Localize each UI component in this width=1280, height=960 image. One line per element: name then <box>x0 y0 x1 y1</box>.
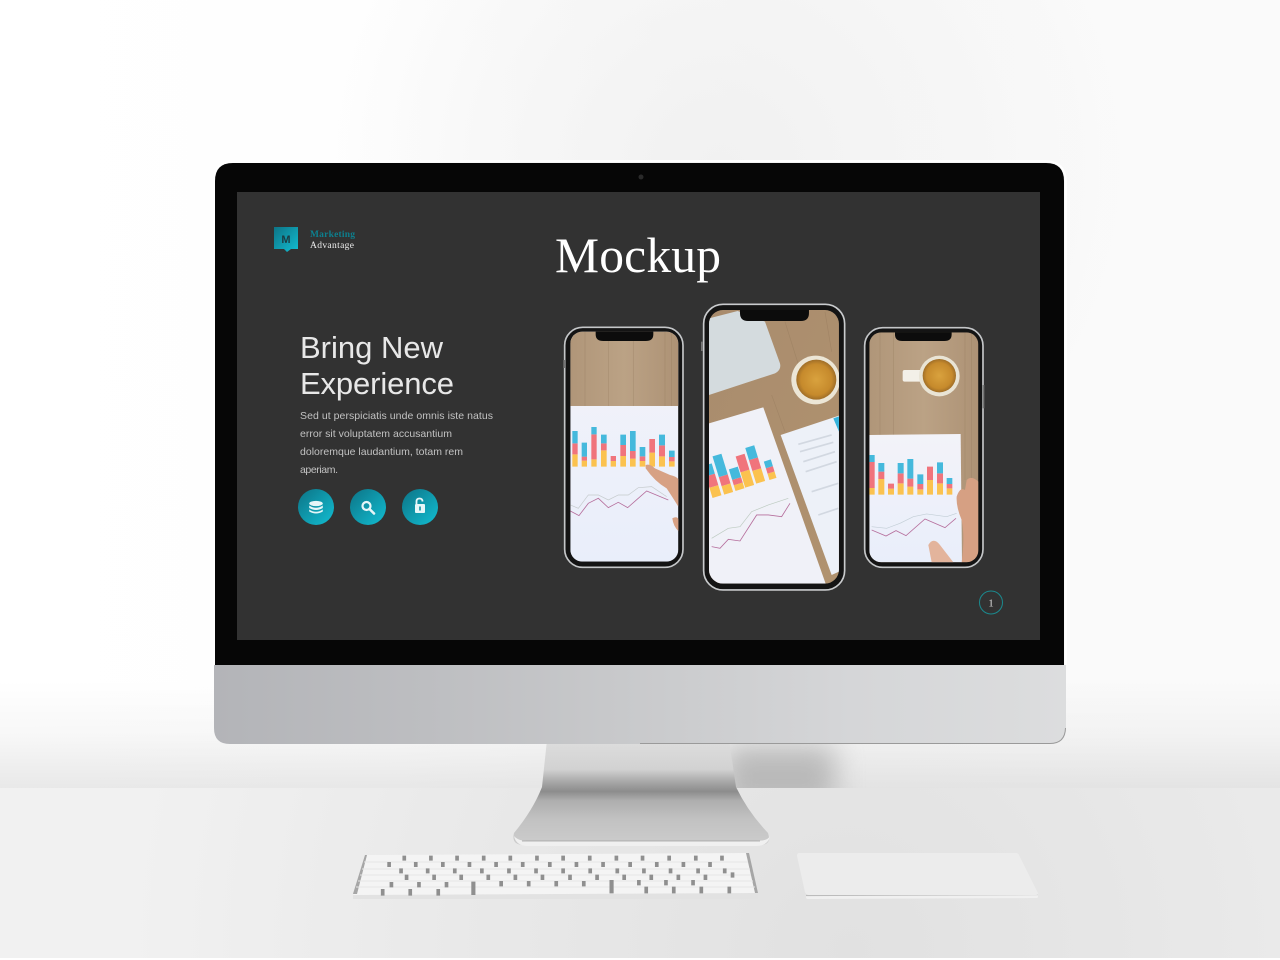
icon: open padlock <box>402 489 438 525</box>
centre phone screen <box>703 310 840 584</box>
logo word: Advantage: Advantage <box>310 241 354 251</box>
icon: database <box>298 489 334 525</box>
desk surface <box>0 788 1280 958</box>
monitor bezel <box>215 163 1064 665</box>
page number <box>980 591 1002 614</box>
coffee cup <box>903 356 960 396</box>
heading: Bring New <box>300 330 444 365</box>
slide screen <box>237 192 1040 640</box>
keyboard <box>353 853 758 899</box>
hand <box>957 478 978 562</box>
monitor chin <box>214 665 1066 744</box>
body text: doloremque laudantium, totam rem <box>300 446 463 458</box>
keyboard side edges <box>353 853 758 894</box>
chin edge <box>640 728 1066 744</box>
logo mark: M <box>281 234 291 246</box>
coffee cup <box>791 356 840 404</box>
rotated bar chart <box>703 445 776 498</box>
key gaps <box>381 856 734 896</box>
body text: error sit voluptatem accusantium <box>300 428 452 440</box>
line chart <box>872 513 957 536</box>
laptop <box>709 311 780 395</box>
right phone screen <box>869 332 978 562</box>
logo <box>274 227 355 252</box>
icon: search <box>350 489 386 525</box>
report paper <box>709 407 826 584</box>
second paper <box>781 416 839 575</box>
line chart <box>712 498 790 548</box>
stacked bar chart <box>572 427 675 467</box>
page number: 1 <box>988 598 994 610</box>
heading <box>300 330 454 401</box>
body text: Sed ut perspiciatis unde omnis iste natus <box>300 410 493 422</box>
monitor <box>214 161 1066 744</box>
trackpad <box>797 853 1038 899</box>
phone: right <box>865 328 984 567</box>
notch <box>895 332 952 341</box>
line chart <box>570 487 668 516</box>
title: Mockup <box>555 228 721 283</box>
trackpad surface <box>797 853 1038 895</box>
monitor stand <box>513 740 770 846</box>
webcam <box>638 174 644 180</box>
wood desk <box>570 332 678 406</box>
notch <box>596 332 653 341</box>
body text: aperiam. <box>300 464 338 476</box>
trackpad lip <box>806 893 1038 899</box>
left phone screen <box>570 332 680 562</box>
phone: centre <box>701 304 845 590</box>
report paper <box>869 434 962 562</box>
logo word: Marketing: Marketing <box>310 230 355 240</box>
notch <box>740 310 809 321</box>
stacked bar chart <box>869 455 952 495</box>
hand <box>646 465 680 507</box>
outer highlight <box>214 161 1066 665</box>
key row lines <box>356 862 755 887</box>
phone: left <box>563 327 683 567</box>
heading: Experience <box>300 366 454 401</box>
body text <box>300 410 493 476</box>
